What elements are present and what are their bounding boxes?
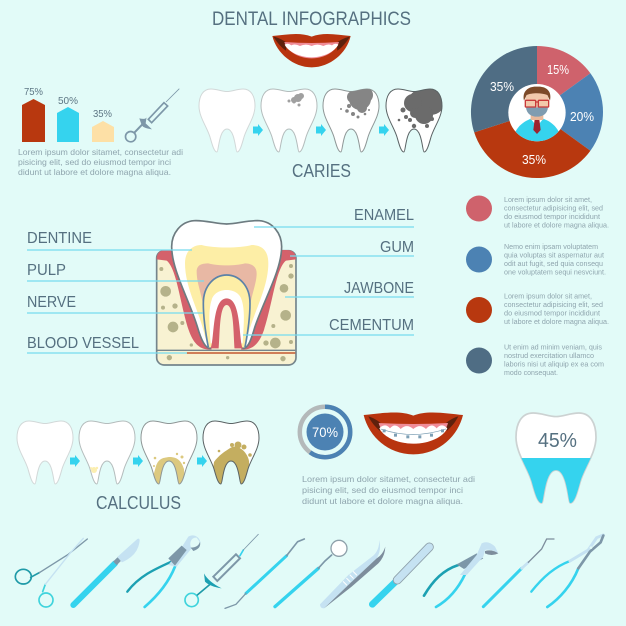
pie chart — [471, 46, 603, 178]
icon: syringe — [125, 89, 179, 142]
tooth: advanced calculus — [203, 421, 259, 484]
dentine — [185, 245, 268, 347]
legend item: blue — [466, 244, 606, 276]
pie labels: 35% — [490, 80, 514, 94]
pulp — [197, 263, 257, 310]
heading: calculus: CALCULUS — [96, 493, 181, 513]
bone pores — [159, 264, 294, 361]
title: DENTAL INFOGRAPHICS — [212, 9, 411, 30]
instruments row left — [15, 534, 304, 608]
tooth enamel — [172, 221, 282, 348]
anatomy labels: PULP — [27, 262, 66, 279]
legend item: pink: consectetur adipisicing elit, sed — [504, 206, 603, 212]
gauge value: 70% — [312, 425, 338, 440]
braces — [381, 429, 446, 438]
bar value labels: 75% — [24, 86, 43, 98]
icon: dentist avatar — [508, 84, 566, 143]
text block: bars: pisicing elit, sed do eiusmod tempor inci — [18, 157, 171, 167]
tooth: clean — [17, 421, 73, 484]
legend item: red: do eiusmod tempor incididunt — [504, 310, 600, 318]
tooth gauge value: 45% — [538, 430, 577, 452]
pie labels — [490, 63, 594, 167]
text block: braces: didunt ut labore et dolore magna aliqua. — [302, 496, 463, 506]
gum — [157, 250, 296, 349]
bar chart — [22, 86, 114, 142]
tooth anatomy diagram — [157, 221, 296, 365]
anatomy labels: BLOOD VESSEL — [27, 335, 139, 352]
anatomy labels: CEMENTUM — [329, 317, 414, 334]
bar value labels: 35% — [93, 108, 112, 120]
pie labels: 20% — [570, 110, 594, 124]
tooth: advanced caries — [386, 87, 445, 152]
instrument: hemostat forceps — [15, 538, 87, 607]
caries tooth sequence — [199, 87, 445, 152]
blood vessel — [157, 350, 295, 353]
anatomy leader lines — [27, 227, 414, 353]
legend item: pink — [466, 196, 609, 230]
arrow — [70, 455, 80, 467]
legend item: pink: ut labore et dolore magna aliqua. — [504, 222, 609, 230]
instrument: pliers — [127, 535, 201, 607]
anatomy labels: DENTINE — [27, 230, 92, 247]
instrument: explorer — [483, 539, 554, 607]
arrow — [379, 124, 389, 136]
arrow — [316, 124, 326, 136]
icon: smiling lips — [272, 34, 351, 67]
text block: bars: Lorem ipsum dolor sitamet, consectetur adi — [18, 147, 183, 157]
legend item: blue: one voluptatem sequi nesvciunt. — [504, 270, 606, 276]
text block: braces: Lorem ipsum dolor sitamet, consectetur adi — [302, 474, 475, 484]
legend item: slate — [466, 344, 604, 377]
icon: lips with braces — [364, 412, 463, 454]
text block: bars — [18, 147, 183, 177]
legend item: red: consectetur adipisicing elit, sed — [504, 302, 603, 309]
instrument: spatula — [372, 547, 429, 604]
instrument: probe — [225, 539, 304, 608]
legend item: red — [466, 294, 609, 326]
arrow — [133, 455, 143, 467]
legend item: red: ut labore et dolore magna aliqua. — [504, 319, 609, 326]
legend item: blue: odit aut fugit, sed quia consequ — [504, 261, 603, 268]
pie labels: 15% — [547, 63, 569, 77]
jawbone — [157, 251, 296, 365]
legend item: slate: Ut enim ad minim veniam, quis — [504, 344, 603, 352]
tooth gauge 45% — [516, 413, 596, 504]
tooth: early caries — [261, 89, 317, 152]
tooth: moderate caries — [323, 87, 379, 152]
donut gauge 70% — [300, 407, 350, 457]
pie labels: 35% — [522, 153, 546, 167]
root canal — [211, 298, 243, 348]
instrument: mirror — [275, 540, 347, 607]
anatomy labels: JAWBONE — [344, 280, 414, 297]
instrument: scalpel — [73, 539, 140, 605]
tooth: healthy — [199, 89, 255, 152]
arrow — [253, 124, 263, 136]
legend item: slate: laboris nisi ut aliquip ex ea com — [504, 362, 604, 368]
text block: braces: pisicing elit, sed do eiusmod tempor inci — [302, 485, 463, 495]
legend item: slate: nostrud exercitation ullamco — [504, 353, 594, 360]
instrument: extraction forceps — [424, 542, 498, 607]
nerve — [203, 275, 250, 347]
anatomy labels: GUM — [380, 239, 414, 256]
pulp inner arch — [203, 275, 250, 347]
anatomy labels — [27, 207, 414, 352]
legend — [466, 196, 609, 377]
arrow — [197, 455, 207, 467]
bar value labels — [24, 86, 112, 120]
instrument: curved pliers — [531, 535, 603, 607]
text block: braces — [302, 474, 475, 506]
legend item: blue: quia voluptas sit aspernatur aut — [504, 252, 604, 260]
anatomy labels: ENAMEL — [354, 207, 414, 224]
text block: bars: didunt ut labore et dolore magna aliqua. — [18, 167, 171, 177]
tooth: moderate calculus — [141, 421, 197, 484]
legend item: pink: do eiusmod tempor incididunt — [504, 214, 600, 221]
legend item: blue: Nemo enim ipsam voluptatem — [504, 244, 598, 251]
legend item: red: Lorem ipsum dolor sit amet, — [504, 294, 592, 300]
legend item: pink: Lorem ipsum dolor sit amet, — [504, 197, 592, 204]
instrument: dental syringe — [185, 534, 258, 607]
bar value labels: 50% — [58, 95, 78, 107]
instrument: tweezers — [320, 540, 385, 608]
heading: caries: CARIES — [292, 161, 351, 181]
calculus tooth sequence — [17, 421, 259, 484]
instruments row right — [275, 535, 603, 608]
legend item: slate: modo consequat. — [504, 370, 558, 377]
anatomy labels: NERVE — [27, 294, 76, 311]
tooth: early calculus — [79, 421, 135, 484]
